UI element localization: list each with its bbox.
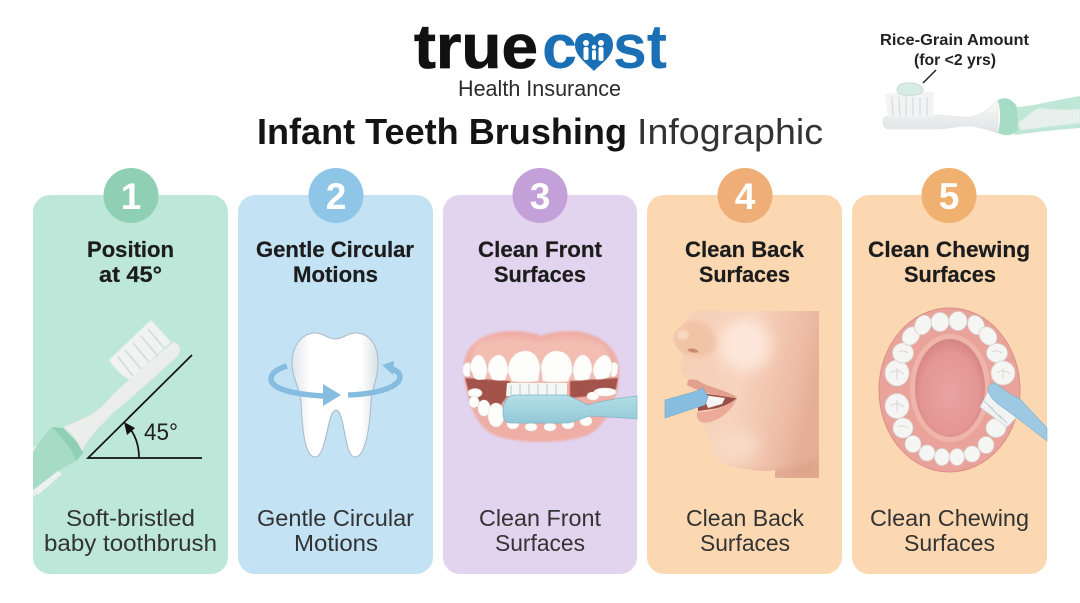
panel 5: clean chewing surfaces	[852, 168, 1047, 574]
panel 1 caption: Soft-bristled	[66, 505, 195, 531]
panel 5 heading: Surfaces	[904, 262, 996, 287]
icon: tooth with circular arrows	[271, 333, 400, 457]
callout: rice-grain amount toothbrush	[880, 32, 1080, 135]
logo wordmark: cost	[542, 13, 667, 82]
panel 3 caption: Clean Front	[479, 505, 602, 531]
panel 2 caption	[257, 505, 414, 556]
illustration: open mouth with lower teeth arch and brush	[879, 308, 1047, 472]
icon: toothbrush at 45 degrees	[33, 320, 180, 497]
panel 2 caption: Gentle Circular	[257, 505, 414, 531]
panel 4 caption: Surfaces	[700, 530, 790, 556]
callout text: (for <2 yrs)	[914, 52, 996, 69]
step badge 4	[718, 168, 772, 223]
illustration: baby face profile with toothbrush	[665, 305, 825, 480]
panel 3: clean front surfaces	[443, 168, 637, 574]
main title: Infant Teeth Brushing	[257, 111, 627, 152]
main title	[257, 111, 823, 152]
panel 4 caption: Clean Back	[686, 505, 804, 531]
panel 5 caption: Clean Chewing	[870, 505, 1029, 531]
logo wordmark: cost: c	[542, 13, 577, 82]
icon: teeth with toothbrush on front surfaces	[463, 331, 637, 442]
step badge 5: 5	[939, 176, 959, 217]
panel 3 heading	[478, 237, 603, 287]
panel 3 heading: Surfaces	[494, 262, 586, 287]
panel 4 heading: Clean Back	[685, 237, 805, 262]
dark mouth openings	[465, 378, 618, 406]
step badge 3	[512, 168, 568, 223]
angle diagram 45 degrees: 45°	[144, 419, 178, 446]
panel 2 heading	[256, 237, 414, 287]
callout text	[880, 32, 1030, 69]
logo wordmark: true: true	[414, 13, 538, 82]
panel 5 heading: Clean Chewing	[868, 237, 1030, 262]
panel 5 caption	[870, 505, 1029, 556]
panel 3 caption	[479, 505, 602, 556]
panel 3 caption: Surfaces	[495, 530, 585, 556]
step badge 1: 1	[121, 176, 141, 217]
panel 2 heading: Motions	[293, 262, 378, 287]
callout text: Rice-Grain Amount	[880, 32, 1030, 49]
panel 2: gentle circular motions	[238, 168, 433, 574]
panel 4 heading: Surfaces	[699, 262, 790, 287]
panel 3 heading: Clean Front	[478, 237, 603, 262]
panel 5 caption: Surfaces	[904, 530, 995, 556]
step badge 3: 3	[530, 176, 550, 217]
panel 1 heading	[87, 237, 174, 287]
step badge 4: 4	[735, 176, 756, 217]
panel 4 caption	[686, 505, 804, 556]
panel 1: position at 45 degrees	[33, 168, 228, 574]
logo wordmark: cost: st	[613, 13, 667, 82]
panel 1 caption	[44, 505, 217, 556]
logo subtitle: Health Insurance	[458, 76, 621, 101]
main title: Infographic	[637, 111, 823, 152]
panel 5 heading	[868, 237, 1030, 287]
panel 4: clean back surfaces	[647, 168, 842, 574]
panel 4 heading	[685, 237, 805, 287]
angle diagram 45 degrees	[88, 355, 202, 458]
panel 2 heading: Gentle Circular	[256, 237, 414, 262]
panel 1 heading: at 45°	[99, 262, 162, 287]
panel 1 heading: Position	[87, 237, 174, 262]
logo	[414, 13, 667, 101]
step badge 1	[104, 168, 158, 223]
panel 2 caption: Motions	[294, 530, 378, 556]
step badge 5	[922, 168, 976, 223]
icon: horizontal toothbrush with paste	[883, 83, 1080, 135]
step badge 2: 2	[326, 176, 346, 217]
panel 1 caption: baby toothbrush	[44, 530, 217, 556]
step badge 2	[308, 168, 364, 223]
